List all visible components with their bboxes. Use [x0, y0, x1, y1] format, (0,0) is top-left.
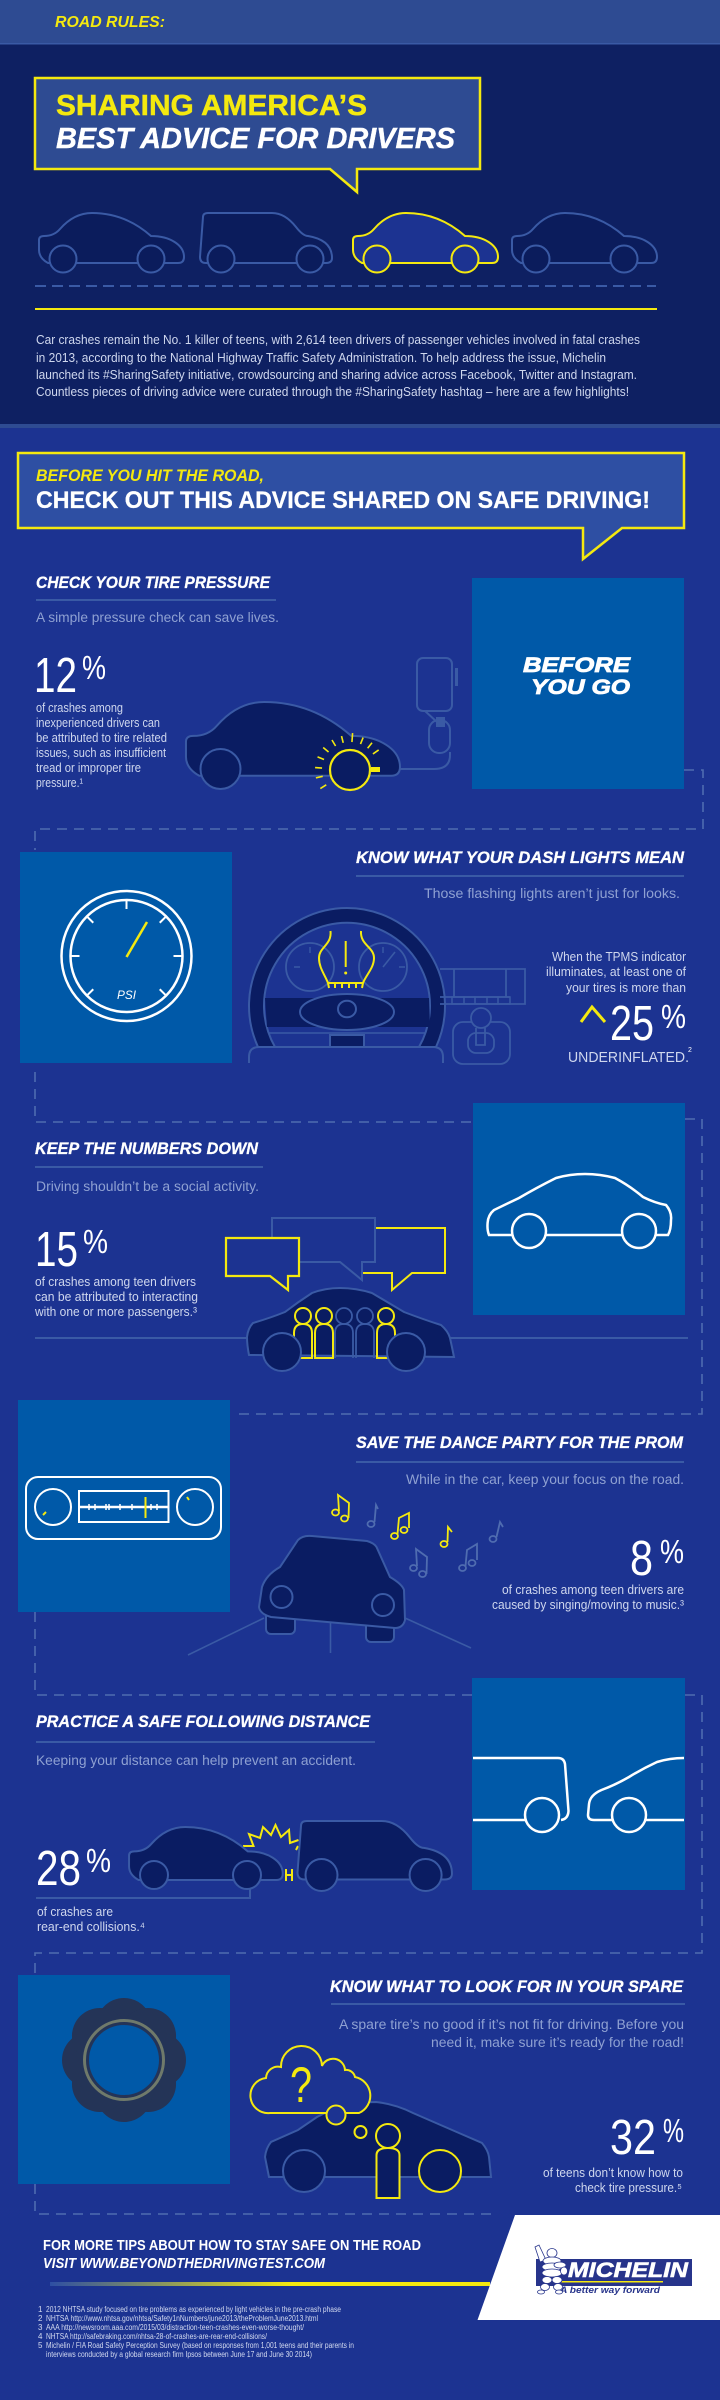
- subtitle: [339, 2017, 684, 2050]
- stat description: check tire pressure.⁵: [575, 2181, 682, 2195]
- intro paragraph: launched its #SharingSafety initiative, crowdsourcing and sharing advice across Facebook, Twitter and Instagram.: [36, 368, 637, 382]
- panel: psi gauge: PSI: [117, 988, 137, 1002]
- stat: 15%: %: [83, 1223, 108, 1260]
- stat: 25% underinflated: your tires is more than: [566, 981, 686, 995]
- stat description: [34, 1275, 198, 1319]
- michelin logo panel: MICHELIN: [568, 2259, 689, 2282]
- stat: 32%: 32: [610, 2111, 656, 2165]
- icon: car with glowing tire and pump: [186, 658, 458, 790]
- stat: 12%: 12: [34, 649, 77, 703]
- stat description: [492, 1583, 684, 1612]
- panel: know your spare: [18, 1975, 685, 2198]
- icon: car with music notes: [188, 1495, 503, 1655]
- stat: 15%: 15: [35, 1223, 78, 1277]
- stat: 25% underinflated: UNDERINFLATED.: [568, 1049, 689, 1066]
- stat: 28%: 28: [36, 1842, 81, 1896]
- heading: keep the numbers down: KEEP THE NUMBERS DOWN: [35, 1140, 259, 1158]
- stat: 12%: %: [82, 649, 106, 686]
- stat description: of crashes among teen drivers are: [502, 1583, 684, 1597]
- stat description: [37, 1905, 145, 1934]
- stat: 8%: [630, 1532, 684, 1586]
- title speech bubble: SHARING AMERICA’S: [56, 90, 367, 122]
- stat: 25% underinflated: %: [661, 998, 686, 1035]
- footnotes: 5: [38, 2341, 43, 2350]
- stat: 25% underinflated: 25: [610, 997, 654, 1051]
- title speech bubble: [35, 78, 480, 192]
- stat description: [543, 2166, 683, 2195]
- footnotes: NHTSA http://www.nhtsa.gov/nhtsa/Safety1nNumbers/june2013/theProblemJune2013.html: [46, 2314, 318, 2323]
- subtitle: Driving shouldn’t be a social activity.: [36, 1179, 259, 1194]
- icon: car with confused driver: [250, 2046, 491, 2198]
- stat: 8%: %: [660, 1533, 684, 1570]
- footnotes: Michelin / FIA Road Safety Perception Survey (based on responses from 1,001 teens and their parents in: [46, 2341, 354, 2350]
- footnotes: AAA http://newsroom.aaa.com/2015/03/distraction-teen-crashes-even-worse-thought/: [46, 2323, 305, 2332]
- icon: steering wheel and dash warning light: [249, 908, 525, 1064]
- panel: car outline: [473, 1103, 685, 1315]
- footnotes: 4: [38, 2332, 43, 2341]
- subtitle: need it, make sure it’s ready for the road!: [431, 2035, 684, 2050]
- panel: before you go: YOU GO: [531, 676, 630, 699]
- michelin logo panel: A better way forward: [559, 2285, 661, 2295]
- stat description: of crashes among: [36, 701, 123, 715]
- heading: check your tire pressure: CHECK YOUR TIRE PRESSURE: [36, 574, 271, 592]
- call to action: FOR MORE TIPS ABOUT HOW TO STAY SAFE ON THE ROAD: [43, 2237, 421, 2254]
- footnotes: 1: [38, 2305, 43, 2314]
- call to action: VISIT WWW.BEYONDTHEDRIVINGTEST.COM: [43, 2255, 325, 2272]
- panel: keep the numbers down: [34, 1103, 688, 1371]
- stat: 25% underinflated: When the TPMS indicator: [552, 950, 686, 964]
- icon: car with confused driver: ?: [290, 2057, 312, 2113]
- subtitle: Those flashing lights aren’t just for looks.: [424, 886, 680, 901]
- stat description: of crashes among teen drivers: [35, 1275, 196, 1289]
- subtitle: While in the car, keep your focus on the road.: [406, 1472, 684, 1487]
- intro paragraph: Car crashes remain the No. 1 killer of teens, with 2,614 teen drivers of passenger vehicles involved in fatal crashes: [36, 333, 640, 347]
- stat: 25% underinflated: 2: [688, 1047, 692, 1054]
- stat: 8%: 8: [630, 1532, 653, 1586]
- heading: dash lights: KNOW WHAT YOUR DASH LIGHTS MEAN: [356, 849, 685, 867]
- icon: michelin man: [535, 2245, 568, 2294]
- subtitle: A simple pressure check can save lives.: [36, 610, 279, 625]
- heading: dance party: SAVE THE DANCE PARTY FOR THE PROM: [356, 1434, 684, 1452]
- stat: 32%: %: [663, 2112, 684, 2149]
- stat description: of crashes are: [37, 1905, 113, 1919]
- footnotes: 2: [38, 2314, 43, 2323]
- panel: check your tire pressure: [34, 574, 684, 790]
- footnotes: interviews conducted by a global research firm Ipsos between June 17 and June 30 2014): [46, 2350, 312, 2359]
- intro paragraph: in 2013, according to the National Highway Traffic Safety Administration. To help address the issue, Michelin: [36, 351, 606, 365]
- top label: road rules: ROAD RULES:: [55, 14, 165, 31]
- stat description: with one or more passengers.³: [34, 1305, 197, 1319]
- stat: 25% underinflated: [546, 950, 692, 1066]
- section banner speech bubble: CHECK OUT THIS ADVICE SHARED ON SAFE DRIVING!: [36, 487, 650, 514]
- footnotes: NHTSA http://safebraking.com/nhtsa-28-of-crashes-are-rear-end-collisions/: [46, 2332, 268, 2341]
- icon: car full of passengers with speech bubbles: [226, 1218, 454, 1371]
- stat description: pressure.¹: [36, 776, 83, 790]
- panel: car radio: [18, 1400, 230, 1612]
- subtitle: Keeping your distance can help prevent an accident.: [36, 1753, 356, 1768]
- panel: save the dance party: [18, 1400, 684, 1655]
- michelin logo panel: [478, 2215, 720, 2320]
- icon: rear-end collision: [36, 1821, 452, 1898]
- row of cars icons: [39, 213, 657, 272]
- footnotes: [38, 2305, 354, 2359]
- section banner speech bubble: [18, 453, 684, 559]
- intro paragraph: [36, 333, 640, 399]
- dashed route connector: [35, 770, 703, 2214]
- footnotes: 3: [38, 2323, 43, 2332]
- stat description: [36, 701, 167, 790]
- stat description: of teens don’t know how to: [543, 2166, 683, 2180]
- stat description: tread or improper tire: [36, 761, 141, 775]
- stat description: issues, such as insufficient: [36, 746, 166, 760]
- stat description: be attributed to tire related: [36, 731, 167, 745]
- stat description: rear-end collisions.⁴: [37, 1920, 145, 1934]
- stat description: caused by singing/moving to music.³: [492, 1598, 684, 1612]
- subtitle: A spare tire’s no good if it’s not fit for driving. Before you: [339, 2017, 684, 2032]
- section banner speech bubble: BEFORE YOU HIT THE ROAD,: [36, 467, 264, 485]
- panel: safe following distance: [36, 1678, 685, 1934]
- header panel: navy intro: [0, 0, 720, 428]
- heading: following distance: PRACTICE A SAFE FOLLOWING DISTANCE: [36, 1713, 371, 1731]
- panel: spare tire: [18, 1975, 230, 2184]
- panel: know your dash lights: [20, 849, 692, 1066]
- stat: 28%: %: [86, 1842, 111, 1879]
- call to action: [43, 2237, 421, 2272]
- footnotes: 2012 NHTSA study focused on tire problems as experienced by light vehicles in the pre-crash phase: [46, 2305, 341, 2314]
- stat: 25% underinflated: illuminates, at least one of: [546, 965, 687, 979]
- title speech bubble: BEST ADVICE FOR DRIVERS: [56, 123, 456, 155]
- heading: spare: KNOW WHAT TO LOOK FOR IN YOUR SPARE: [330, 1978, 684, 1996]
- panel: van and car gap: [472, 1678, 685, 1890]
- panel: before you go: [472, 578, 684, 789]
- intro paragraph: Countless pieces of driving advice were curated through the #SharingSafety hashtag – here are a few highlights!: [36, 385, 629, 399]
- panel: psi gauge: [20, 852, 232, 1063]
- stat description: inexperienced drivers can: [36, 716, 160, 730]
- panel: before you go: BEFORE: [523, 654, 631, 677]
- stat description: can be attributed to interacting: [35, 1290, 198, 1304]
